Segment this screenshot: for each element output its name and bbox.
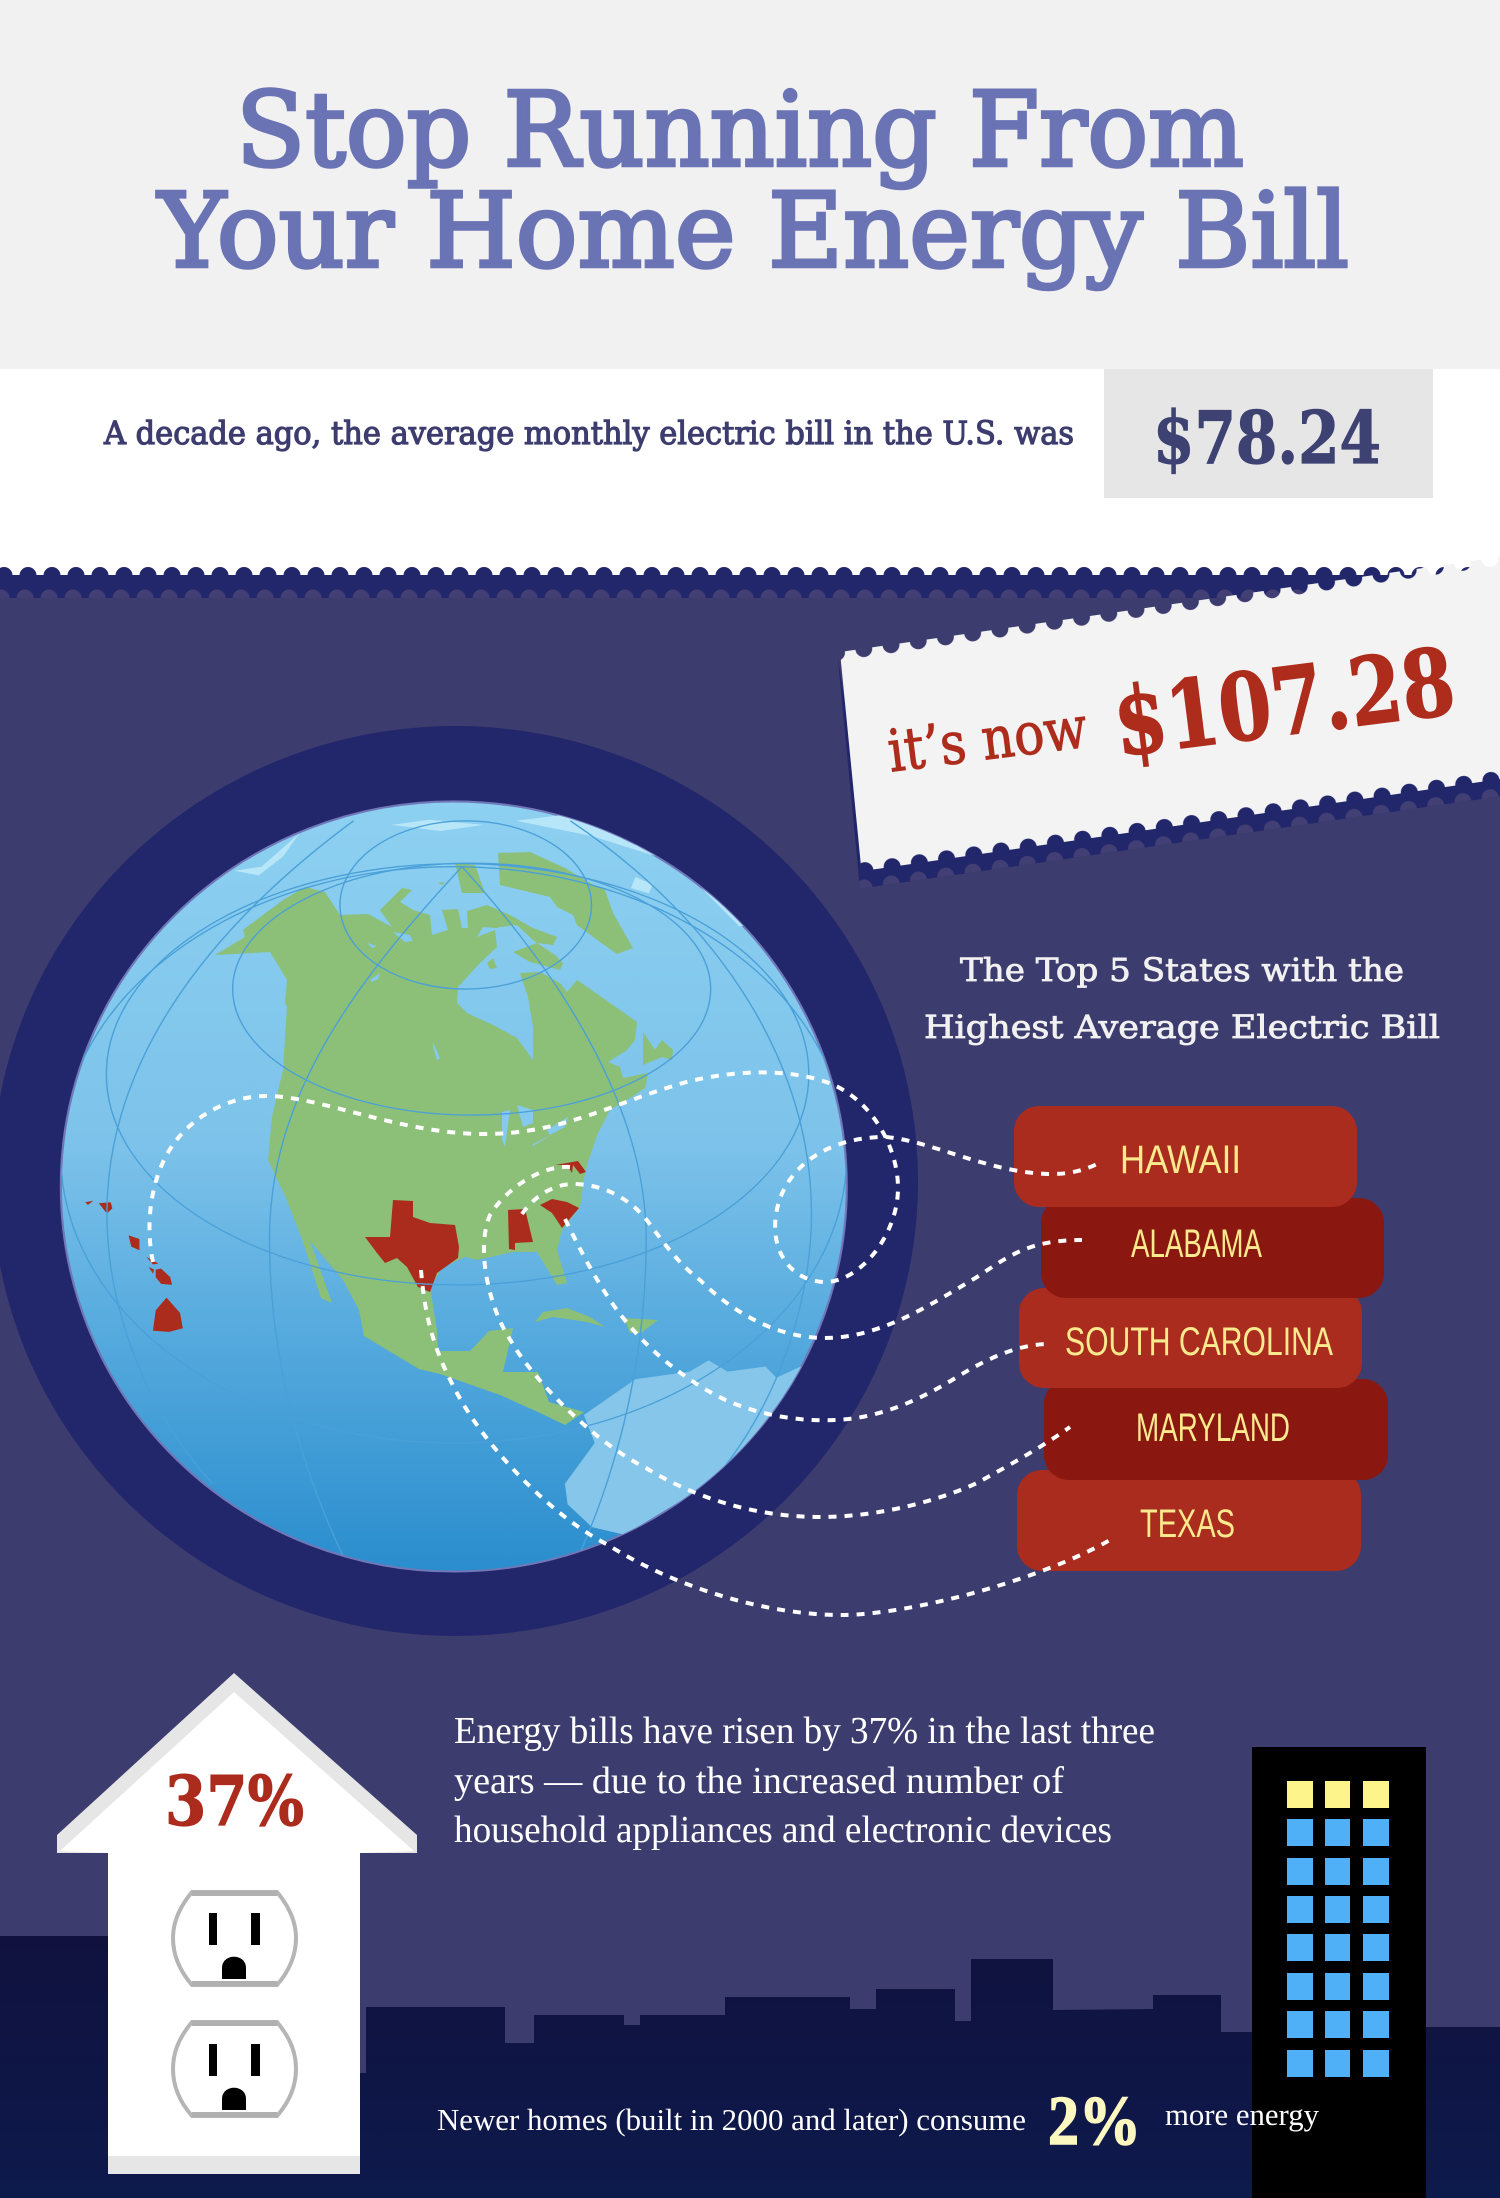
newer homes statement: 2%: [1048, 2083, 1141, 2160]
newer homes statement: more energy: [1165, 2097, 1319, 2132]
rising bills paragraph: household appliances and electronic devices: [454, 1809, 1112, 1851]
globe halo ring: [0, 726, 918, 1636]
arctic islands, newfoundland and caribbean: [438, 852, 673, 1333]
newer homes statement: [437, 2083, 1319, 2160]
rising bills paragraph: Energy bills have risen by 37% in the last three: [454, 1710, 1155, 1752]
state label: south carolina: [1019, 1288, 1362, 1388]
rising bills paragraph: [454, 1710, 1155, 1851]
arrow percentage: 37%: [165, 1762, 304, 1842]
ticket text: it’s now: [884, 693, 1091, 786]
north america land: [215, 887, 648, 1425]
header band: [0, 0, 1500, 575]
state label: maryland: MARYLAND: [1136, 1406, 1290, 1450]
state label: south carolina: SOUTH CAROLINA: [1065, 1320, 1333, 1364]
old price box: $78.24: [1153, 395, 1381, 480]
lakes and inlets: [367, 932, 568, 1147]
red states: [365, 1161, 586, 1292]
old price box: [1104, 369, 1433, 498]
hawaii and graticule: [61, 821, 847, 1555]
state label: alabama: ALABAMA: [1131, 1222, 1262, 1266]
ticket body: [826, 549, 1500, 889]
state label: texas: TEXAS: [1140, 1502, 1235, 1546]
outlet: lower: [173, 2021, 296, 2117]
top 5 heading: Highest Average Electric Bill: [924, 1008, 1440, 1046]
title: Your Home Energy Bill: [156, 172, 1349, 292]
title: Stop Running From: [236, 70, 1244, 190]
decade ago text: A decade ago, the average monthly electric bill in the U.S. was: [103, 414, 1074, 452]
rising arrow house with outlets: [57, 1673, 417, 2174]
now price ticket: [826, 549, 1500, 889]
top 5 heading: [924, 951, 1440, 1046]
dotted connectors: [149, 1072, 1110, 1615]
serrated dark band: [0, 565, 1500, 598]
state label: alabama: [1041, 1198, 1384, 1298]
city skyline: [0, 1936, 1500, 2198]
globe: [61, 801, 847, 1572]
state label: hawaii: HAWAII: [1120, 1138, 1241, 1182]
state label: maryland: [1044, 1379, 1388, 1480]
ticket text: [881, 627, 1461, 806]
top 5 heading: The Top 5 States with the: [960, 951, 1404, 989]
state label: hawaii: [1014, 1106, 1357, 1207]
state label: texas: [1017, 1470, 1361, 1571]
office building with windows: [1252, 1747, 1426, 2198]
rising bills paragraph: years — due to the increased number of: [454, 1760, 1064, 1802]
outlet: upper: [173, 1891, 296, 1986]
newer homes statement: Newer homes (built in 2000 and later) consume: [437, 2102, 1026, 2137]
ocean, ice and south america: [61, 801, 847, 1572]
title: [156, 70, 1349, 292]
